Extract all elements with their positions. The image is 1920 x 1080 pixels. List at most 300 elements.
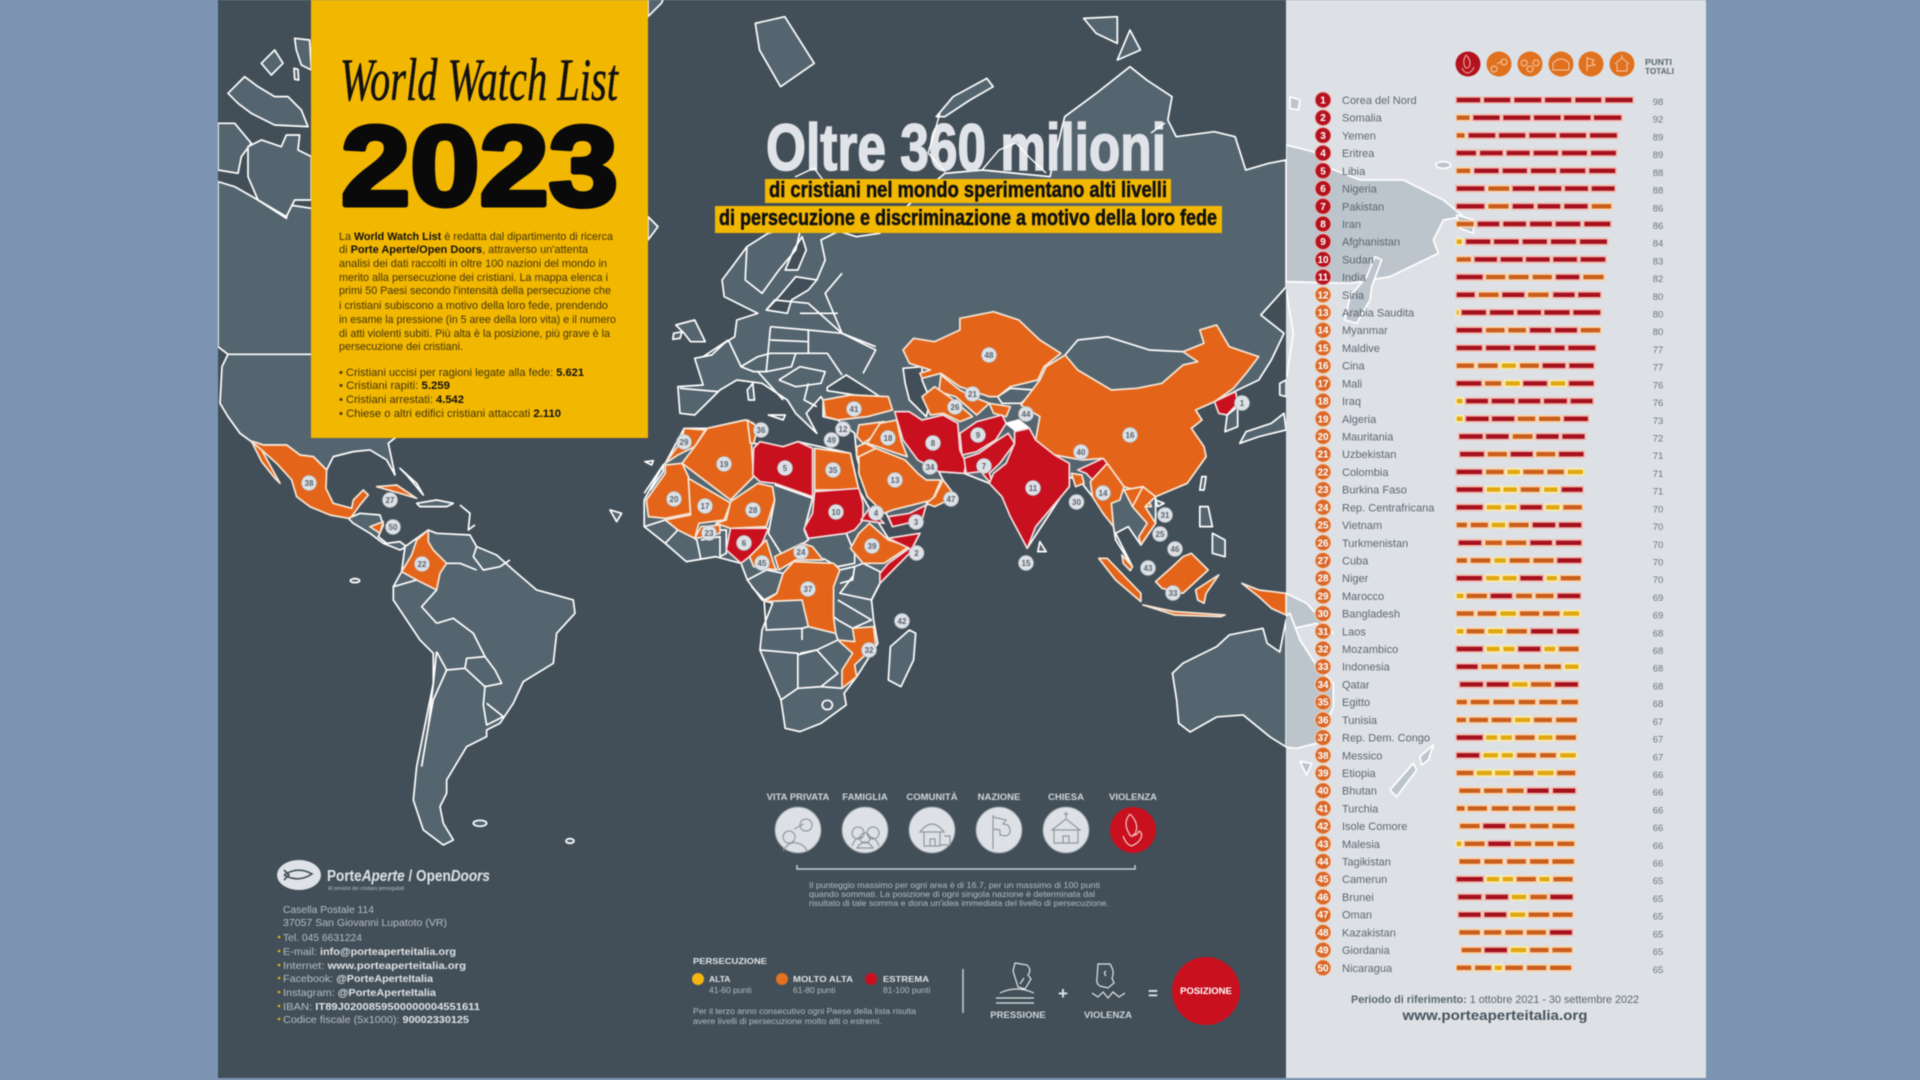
map number labels: 43	[1144, 564, 1153, 573]
row 42: 42	[1317, 822, 1329, 833]
row 41	[1315, 800, 1663, 816]
map number labels: 37	[804, 585, 813, 594]
legend: persecuzione: 81-100 punti	[883, 985, 930, 995]
row 42	[1315, 818, 1663, 834]
map number labels: 39	[868, 542, 877, 551]
intro paragraph: persecuzione dei cristiani.	[339, 341, 463, 353]
map number labels: 42	[898, 617, 907, 626]
row 48: 48	[1317, 928, 1329, 939]
scoring explanation	[809, 880, 1109, 908]
row 9: 84	[1653, 239, 1663, 250]
contact details: E-mail: info@porteaperteitalia.org	[283, 946, 456, 958]
row 31	[1315, 623, 1663, 639]
row 37: Rep. Dem. Congo	[1342, 733, 1430, 745]
intro paragraph: i cristiani subiscono a motivo della loro fede, prendendo	[339, 300, 608, 312]
title: year: 2023	[341, 103, 618, 229]
headline: di persecuzione e discriminazione a motivo della loro fede	[719, 205, 1217, 230]
map number labels: 19	[720, 460, 729, 469]
map number labels: 12	[839, 425, 848, 434]
row 43: 66	[1653, 841, 1663, 852]
row 5	[1315, 163, 1663, 179]
row 16	[1315, 358, 1663, 374]
row 20	[1315, 428, 1663, 444]
row 8	[1315, 216, 1663, 232]
row 17: 17	[1317, 379, 1329, 390]
row 32: Mozambico	[1342, 644, 1398, 656]
contact details: Facebook: @PorteAperteItalia	[283, 973, 433, 985]
map number labels: 45	[758, 559, 767, 568]
row 6: 88	[1653, 186, 1663, 197]
map number labels: 22	[418, 560, 427, 569]
icons: six persecution areas: NAZIONE	[978, 792, 1020, 803]
India and South-East Asia	[989, 428, 1069, 548]
row 11: 82	[1653, 274, 1663, 285]
map number labels: 35	[829, 466, 838, 475]
row 24	[1315, 499, 1663, 515]
map number labels: 11	[1029, 484, 1038, 493]
row 45: 45	[1317, 875, 1329, 886]
row 14: Myanmar	[1342, 325, 1388, 337]
logo: Porte Aperte / Open Doors: Al servizio dei cristiani perseguitati	[328, 886, 404, 892]
row 3: Yemen	[1342, 130, 1376, 142]
intro paragraph: analisi dei dati raccolti in oltre 100 nazioni del mondo in	[339, 258, 607, 270]
row 47: 65	[1653, 912, 1663, 923]
row 40: 66	[1653, 788, 1663, 799]
row 43: 43	[1317, 839, 1329, 850]
row 4: 4	[1320, 149, 1326, 160]
row 39: 66	[1653, 770, 1663, 781]
row 3: 89	[1653, 132, 1663, 143]
row 45: Camerun	[1342, 874, 1387, 886]
chart: ranking of 50 countries	[1315, 92, 1663, 976]
legend: persecuzione: ALTA	[709, 974, 730, 984]
map number labels: 6	[742, 539, 747, 548]
row 20: 72	[1653, 434, 1663, 444]
statistics bullets: • Chiese o altri edifici cristiani attaccati 2.110	[339, 408, 561, 420]
row 23: 23	[1317, 485, 1329, 496]
row 24: 70	[1653, 504, 1663, 515]
row 8: 86	[1653, 221, 1663, 232]
row 30	[1315, 606, 1663, 622]
row 48: Kazakistan	[1342, 927, 1396, 939]
row 20: 20	[1317, 432, 1329, 443]
map number labels: 7	[982, 462, 987, 471]
icons: six persecution areas: COMUNITÀ	[906, 792, 958, 803]
map continuation under the list	[1280, 97, 1473, 797]
row 50: 65	[1653, 965, 1663, 976]
intro paragraph	[339, 231, 616, 353]
row 16: 77	[1653, 363, 1663, 374]
row 27: 70	[1653, 558, 1663, 568]
row 40: 40	[1317, 786, 1329, 797]
contact details: Codice fiscale (5x1000): 90002330125	[283, 1014, 469, 1026]
row 33: 33	[1317, 662, 1329, 673]
row 13: 13	[1317, 308, 1329, 319]
row 4: 89	[1653, 150, 1663, 161]
row 43: Malesia	[1342, 839, 1381, 851]
row 22: Colombia	[1342, 467, 1389, 479]
row 34: 68	[1653, 681, 1663, 692]
map number labels: 9	[976, 431, 981, 440]
row 36: 67	[1653, 717, 1663, 728]
row 37	[1315, 730, 1663, 746]
row 41: Turchia	[1342, 803, 1379, 815]
logo: Porte Aperte / Open Doors	[277, 860, 490, 892]
row 21: 71	[1653, 451, 1663, 462]
panel: yellow intro box	[311, 0, 648, 438]
row 46: Brunei	[1342, 892, 1374, 904]
row 26: 70	[1653, 540, 1663, 551]
formula: pressione + violenza = posizione: +	[1058, 984, 1068, 1003]
contact details: Casella Postale 114	[283, 904, 374, 916]
row 5: 88	[1653, 168, 1663, 179]
row 11	[1315, 269, 1663, 285]
statistics bullets: • Cristiani rapiti: 5.259	[339, 380, 450, 392]
map number labels: 13	[891, 476, 900, 485]
row 24: 24	[1317, 503, 1329, 514]
map number labels: 41	[850, 405, 859, 414]
row 45: 65	[1653, 876, 1663, 887]
row 50: 50	[1317, 963, 1329, 974]
intro paragraph: primi 50 Paesi secondo l'intensità della persecuzione che	[339, 285, 611, 297]
row 42: 66	[1653, 823, 1663, 834]
Africa	[644, 420, 920, 732]
row 36	[1315, 712, 1663, 728]
formula: pressione + violenza = posizione: POSIZIONE	[1180, 986, 1232, 997]
Australia	[1172, 620, 1286, 747]
scoring explanation: Il punteggio massimo per ogni area è di 16.7, per un massimo di 100 punti	[809, 880, 1100, 890]
headline: di cristiani nel mondo sperimentano alti livelli	[769, 177, 1167, 202]
contact details: 37057 San Giovanni Lupatoto (VR)	[283, 917, 447, 929]
row 44: 44	[1317, 857, 1329, 868]
row 33: Indonesia	[1342, 662, 1391, 674]
map number labels: 10	[832, 508, 841, 517]
world map	[218, 0, 1286, 845]
legend: persecuzione: ESTREMA	[883, 974, 929, 984]
row 27: 27	[1317, 556, 1329, 567]
map number labels: 16	[1126, 431, 1135, 440]
row 29	[1315, 588, 1663, 604]
row 6: 6	[1320, 184, 1326, 195]
panel: ranking list	[1286, 0, 1706, 1078]
row 1: 1	[1320, 96, 1326, 106]
row 9: Afghanistan	[1342, 237, 1400, 249]
row 5: 5	[1320, 166, 1326, 177]
row 28	[1315, 570, 1663, 586]
chart header icons	[1456, 52, 1674, 76]
row 24: Rep. Centrafricana	[1342, 502, 1435, 514]
row 19: Algeria	[1342, 414, 1377, 426]
row 30: 69	[1653, 611, 1663, 622]
contact details: IBAN: IT89J0200859500000004551611	[283, 1001, 480, 1013]
row 46: 46	[1317, 892, 1329, 904]
row 15	[1315, 340, 1663, 356]
dark map panel	[218, 0, 1286, 1078]
logo: Porte Aperte / Open Doors: PorteAperte / OpenDoors	[327, 868, 490, 885]
row 35	[1315, 694, 1663, 710]
row 26: Turkmenistan	[1342, 538, 1408, 550]
row 4: Eritrea	[1342, 148, 1375, 160]
row 22: 71	[1653, 469, 1663, 480]
formula: pressione + violenza = posizione: =	[1148, 984, 1158, 1003]
map number labels: 49	[827, 436, 836, 445]
row 25: 70	[1653, 522, 1663, 533]
row 31: Laos	[1342, 626, 1366, 638]
map number labels: 33	[1169, 589, 1178, 598]
row 39	[1315, 765, 1663, 781]
bracket	[797, 865, 1135, 869]
row 4	[1315, 145, 1663, 161]
Central and South America	[250, 441, 653, 845]
row 15: 77	[1653, 345, 1663, 356]
row 6	[1315, 181, 1663, 197]
map number labels: 44	[1022, 410, 1031, 419]
map number labels: 38	[305, 479, 314, 488]
row 10: 10	[1317, 255, 1329, 266]
divider	[962, 969, 964, 1013]
row 10: Sudan	[1342, 254, 1374, 266]
row 20: Mauritania	[1342, 432, 1394, 444]
map number labels: 20	[670, 495, 679, 504]
row 14: 80	[1653, 327, 1663, 338]
row 33	[1315, 659, 1663, 675]
row 39: Etiopia	[1342, 768, 1377, 780]
icons: six persecution areas: FAMIGLIA	[842, 792, 888, 803]
row 25: 25	[1317, 520, 1329, 532]
North America	[218, 0, 665, 475]
row 35: 68	[1653, 699, 1663, 710]
map number labels: 29	[680, 438, 689, 447]
row 40: Bhutan	[1342, 786, 1377, 798]
row 1: 98	[1653, 97, 1663, 108]
statistics bullets: • Cristiani uccisi per ragioni legate alla fede: 5.621	[339, 367, 584, 379]
map number labels: 26	[951, 403, 960, 412]
row 3: 3	[1320, 131, 1326, 142]
intro paragraph: in esame la pressione (in 5 aree della loro vita) e il numero	[339, 314, 616, 326]
row 29: Marocco	[1342, 591, 1384, 603]
map number labels: 3	[914, 518, 919, 527]
row 31: 68	[1653, 628, 1663, 639]
row 33: 68	[1653, 664, 1663, 675]
row 44	[1315, 854, 1663, 870]
row 12: 80	[1653, 292, 1663, 303]
row 19: 73	[1653, 416, 1663, 427]
row 38: 38	[1317, 751, 1329, 762]
map number labels: 4	[874, 509, 879, 518]
row 2: Somalia	[1342, 113, 1383, 125]
chart header icons: TOTALI	[1645, 66, 1674, 76]
row 49: 65	[1653, 947, 1663, 958]
map number labels: 24	[797, 548, 806, 557]
row 49	[1315, 942, 1663, 958]
row 32: 32	[1317, 644, 1329, 656]
row 23	[1315, 482, 1663, 498]
row 16: 16	[1317, 361, 1329, 372]
row 9	[1315, 234, 1663, 250]
row 49: Giordania	[1342, 945, 1391, 957]
legend: persecuzione: PERSECUZIONE	[693, 956, 767, 966]
row 19: 19	[1317, 414, 1329, 425]
row 43	[1315, 836, 1663, 852]
map number labels: 5	[783, 464, 788, 473]
row 42: Isole Comore	[1342, 821, 1407, 833]
row 35: 35	[1317, 698, 1329, 709]
row 41: 41	[1317, 804, 1329, 815]
row 21: 21	[1317, 450, 1329, 461]
chart header icons: PUNTI	[1645, 57, 1672, 67]
row 28: 70	[1653, 575, 1663, 586]
legend: persecuzione	[692, 956, 930, 1026]
row 11: 11	[1318, 273, 1329, 284]
row 5: Libia	[1342, 166, 1366, 178]
Middle East	[823, 395, 893, 420]
map number labels: 40	[1077, 448, 1086, 457]
row 6: Nigeria	[1342, 184, 1378, 196]
row 34: Qatar	[1342, 679, 1370, 691]
row 27	[1315, 552, 1663, 568]
icons: six persecution areas	[767, 792, 1157, 853]
row 30: Bangladesh	[1342, 609, 1400, 621]
row 46: 65	[1653, 894, 1663, 905]
row 14	[1315, 322, 1663, 338]
contact details	[278, 904, 480, 1026]
row 25	[1315, 517, 1663, 533]
legend: persecuzione: avere livelli di persecuzione molto alti o estremi.	[693, 1017, 882, 1026]
row 12: 12	[1317, 290, 1329, 301]
map number labels: 17	[701, 502, 710, 511]
map number labels: 1	[1240, 399, 1245, 408]
headline	[715, 110, 1222, 233]
row 40	[1315, 783, 1663, 799]
row 44: Tagikistan	[1342, 856, 1391, 868]
row 38: Messico	[1342, 750, 1382, 762]
row 37: 37	[1317, 733, 1329, 744]
map number labels: 48	[985, 351, 994, 360]
row 7: 7	[1320, 202, 1326, 213]
row 18	[1315, 393, 1663, 409]
map number labels: 2	[914, 549, 919, 558]
row 26: 26	[1317, 538, 1329, 549]
row 38: 67	[1653, 752, 1663, 763]
row 13: 80	[1653, 310, 1663, 320]
formula: pressione + violenza = posizione: VIOLENZA	[1084, 1010, 1132, 1021]
map number labels: 36	[757, 426, 766, 435]
row 3	[1315, 127, 1663, 143]
row 39: 39	[1317, 768, 1329, 780]
row 21	[1315, 446, 1663, 462]
row 25: Vietnam	[1342, 520, 1382, 532]
row 35: Egitto	[1342, 697, 1370, 709]
row 11: India	[1342, 272, 1367, 284]
map number labels: 21	[968, 390, 977, 399]
row 36: 36	[1317, 715, 1329, 726]
row 26	[1315, 535, 1663, 551]
row 36: Tunisia	[1342, 715, 1378, 727]
row 46	[1315, 889, 1663, 905]
row 7	[1315, 198, 1663, 214]
row 29: 69	[1653, 593, 1663, 604]
website: www.porteaperteitalia.org	[1401, 1007, 1588, 1023]
row 29: 29	[1317, 591, 1329, 602]
map number labels	[302, 348, 1250, 658]
formula: pressione + violenza = posizione: PRESSIONE	[990, 1010, 1046, 1021]
icons: six persecution areas: CHIESA	[1048, 792, 1084, 803]
map number labels: 34	[926, 463, 935, 472]
row 32: 68	[1653, 646, 1663, 657]
row 2: 2	[1320, 113, 1326, 124]
row 18: 76	[1653, 398, 1663, 409]
map number labels: 14	[1099, 489, 1108, 498]
row 12	[1315, 287, 1663, 303]
headline: Oltre 360 milioni	[766, 110, 1166, 184]
row 2	[1315, 110, 1663, 126]
reference period: Periodo di riferimento: 1 ottobre 2021 - 30 settembre 2022	[1351, 994, 1639, 1006]
row 38	[1315, 747, 1663, 763]
row 10: 83	[1653, 256, 1663, 267]
row 28: 28	[1317, 574, 1329, 585]
contact details: Internet: www.porteaperteitalia.org	[283, 960, 466, 972]
row 23: Burkina Faso	[1342, 485, 1407, 497]
row 1: Corea del Nord	[1342, 95, 1417, 107]
intro paragraph: di Porte Aperte/Open Doors, attraverso un'attenta	[339, 244, 589, 256]
map number labels: 50	[389, 523, 398, 532]
map number labels: 23	[705, 529, 714, 538]
scoring explanation: risultato di tale somma e dona un'idea immediata del livello di persecuzione.	[809, 898, 1109, 908]
row 16: Cina	[1342, 361, 1366, 373]
row 37: 67	[1653, 735, 1663, 746]
scoring explanation: quando sommati. La posizione di ogni singola nazione è determinata dal	[809, 889, 1095, 899]
contact details: Tel. 045 6631224	[283, 932, 362, 944]
map number labels: 31	[1161, 511, 1170, 520]
row 41: 66	[1653, 805, 1663, 816]
row 31: 31	[1317, 627, 1329, 638]
contact details: Instagram: @PorteAperteItalia	[283, 987, 436, 999]
formula: pressione + violenza = posizione	[990, 957, 1240, 1025]
row 44: 66	[1653, 858, 1663, 870]
row 34	[1315, 676, 1663, 692]
row 50	[1315, 960, 1663, 976]
row 22	[1315, 464, 1663, 480]
row 17: 76	[1653, 380, 1663, 391]
row 1	[1315, 92, 1663, 108]
intro paragraph: merito alla persecuzione dei cristiani. La mappa elenca i	[339, 272, 608, 284]
row 9: 9	[1320, 237, 1326, 248]
row 32	[1315, 641, 1663, 657]
row 7: 86	[1653, 203, 1663, 214]
icons: six persecution areas: VITA PRIVATA	[767, 792, 830, 803]
legend: persecuzione: Per il terzo anno consecutivo ogni Paese della lista risulta	[693, 1007, 917, 1016]
row 18: Iraq	[1342, 396, 1361, 408]
row 49: 49	[1317, 946, 1329, 957]
row 45	[1315, 871, 1663, 887]
row 8: Iran	[1342, 219, 1361, 231]
map number labels: 28	[749, 506, 758, 515]
map number labels: 15	[1022, 559, 1031, 568]
row 17: Mali	[1342, 378, 1362, 390]
row 8: 8	[1320, 220, 1326, 230]
legend: persecuzione: 41-60 punti	[709, 985, 752, 995]
icons: six persecution areas: VIOLENZA	[1109, 792, 1157, 803]
row 14: 14	[1317, 326, 1329, 337]
row 15: Maldive	[1342, 343, 1380, 355]
row 13	[1315, 304, 1663, 320]
row 48: 65	[1653, 929, 1663, 940]
row 18: 18	[1317, 397, 1329, 408]
map number labels: 46	[1171, 545, 1180, 554]
row 50: Nicaragua	[1342, 963, 1393, 975]
row 47	[1315, 907, 1663, 923]
map number labels: 25	[1156, 530, 1165, 539]
